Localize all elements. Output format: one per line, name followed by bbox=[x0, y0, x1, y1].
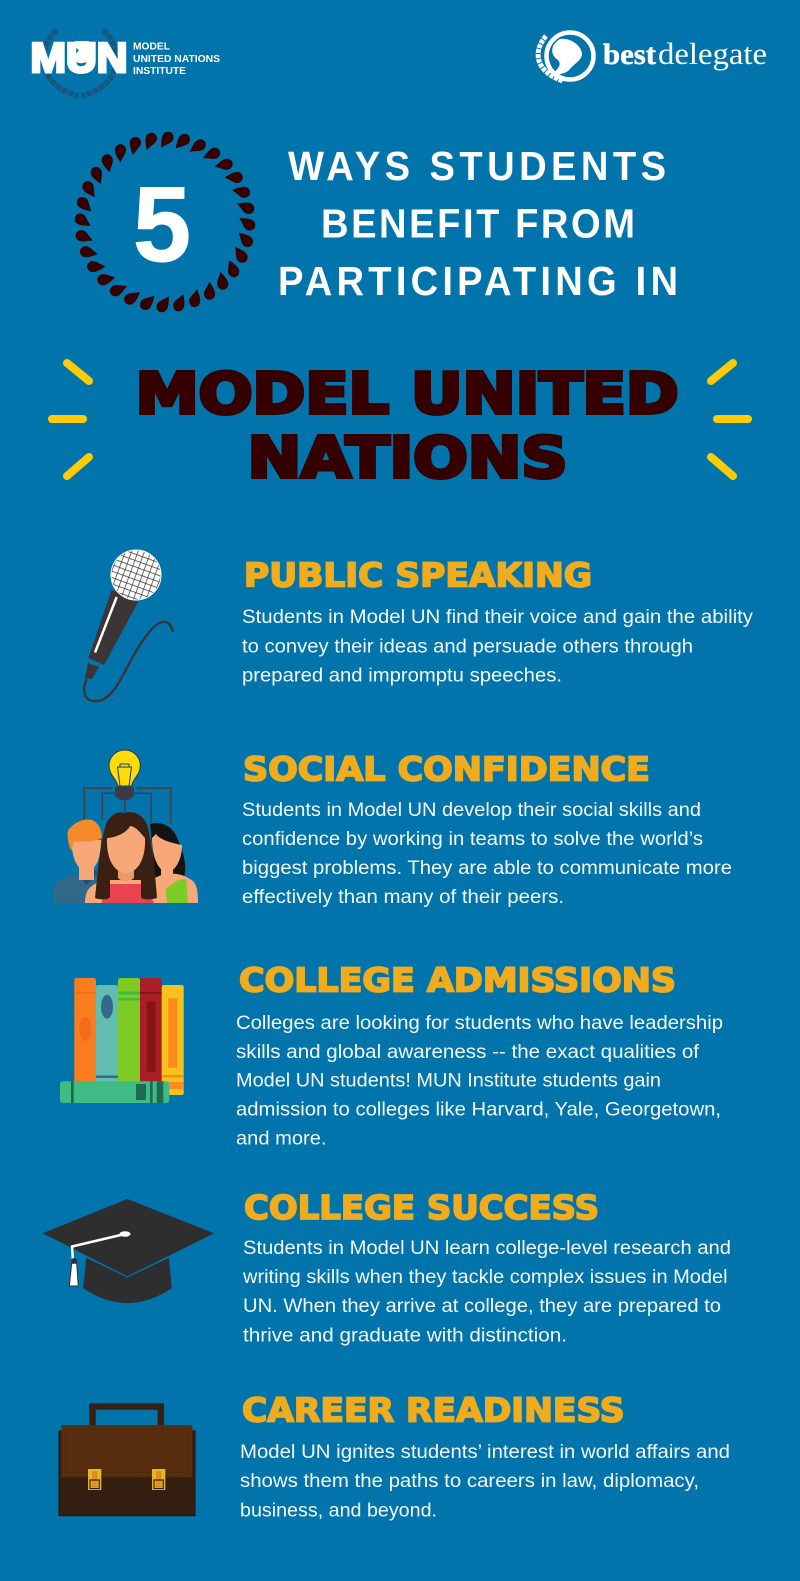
icon: team with light bulb bbox=[54, 750, 198, 903]
title: ways students benefit: PARTICIPATING IN bbox=[278, 259, 678, 304]
section: career readiness: business, and beyond. bbox=[240, 1500, 437, 1522]
section: college success: UN. When they arrive at college, they are prepared to bbox=[243, 1295, 721, 1317]
logo: Best Delegate: best bbox=[603, 38, 656, 71]
logo: MUN Institute bbox=[30, 30, 220, 96]
number badge: 5 in ring of drops: 5 bbox=[133, 164, 191, 284]
section: college admissions: admission to colleges like Harvard, Yale, Georgetown, bbox=[236, 1099, 721, 1121]
section: college admissions: Model UN students! MUN Institute students gain bbox=[236, 1070, 661, 1092]
section: college admissions: and more. bbox=[236, 1128, 326, 1150]
section: social confidence: SOCIAL CONFIDENCE bbox=[243, 750, 650, 788]
logo: MUN Institute: MODEL bbox=[133, 40, 171, 52]
section: college admissions: Colleges are looking for students who have leadership bbox=[236, 1012, 723, 1034]
icon: stack of books bbox=[60, 978, 184, 1103]
section: career readiness bbox=[240, 1390, 730, 1522]
section: public speaking: Students in Model UN find their voice and gain the ability bbox=[242, 606, 753, 628]
title: ways students benefit: WAYS STUDENTS bbox=[288, 144, 666, 189]
icon: briefcase bbox=[59, 1406, 195, 1516]
burst lines: right bbox=[711, 363, 748, 476]
section: college success: writing skills when they tackle complex issues in Model bbox=[242, 1266, 728, 1288]
section: social confidence bbox=[242, 750, 732, 908]
section: social confidence: effectively than many of their peers. bbox=[242, 886, 564, 908]
burst lines: left bbox=[52, 363, 89, 476]
section: college admissions bbox=[236, 960, 723, 1150]
section: public speaking: prepared and impromptu speeches. bbox=[242, 664, 562, 686]
section: college admissions: COLLEGE ADMISSIONS bbox=[239, 960, 676, 1000]
icon: microphone bbox=[84, 550, 173, 701]
logo: MUN Institute: INSTITUTE bbox=[133, 65, 186, 77]
title: ways students benefit: BENEFIT FROM bbox=[321, 201, 635, 247]
number badge: 5 in ring of drops bbox=[74, 131, 256, 313]
section: public speaking bbox=[242, 556, 753, 686]
title: model united nations: MODEL UNITED bbox=[136, 362, 678, 427]
section: social confidence: Students in Model UN develop their social skills and bbox=[242, 799, 701, 821]
section: career readiness: CAREER READINESS bbox=[242, 1390, 624, 1430]
section: college success: thrive and graduate with distinction. bbox=[243, 1324, 567, 1346]
section: public speaking: to convey their ideas and persuade others through bbox=[242, 636, 693, 658]
section: college success: COLLEGE SUCCESS bbox=[244, 1188, 599, 1227]
section: public speaking: PUBLIC SPEAKING bbox=[244, 556, 592, 594]
logo: MUN Institute: MUN bbox=[30, 34, 128, 81]
title: ways students benefit bbox=[278, 144, 678, 304]
title: model united nations bbox=[136, 362, 678, 491]
logo: MUN Institute: UNITED NATIONS bbox=[133, 53, 220, 65]
logo: Best Delegate: delegate bbox=[658, 36, 767, 71]
section: career readiness: Model UN ignites students’ interest in world affairs and bbox=[240, 1441, 730, 1463]
section: college success bbox=[242, 1188, 731, 1346]
logo: Best Delegate bbox=[538, 32, 767, 81]
title: model united nations: NATIONS bbox=[248, 426, 568, 491]
section: career readiness: shows them the paths to careers in law, diplomacy, bbox=[240, 1470, 699, 1492]
section: college success: Students in Model UN learn college-level research and bbox=[243, 1237, 731, 1259]
section: college admissions: skills and global awareness -- the exact qualities of bbox=[236, 1041, 700, 1063]
section: social confidence: confidence by working in teams to solve the world’s bbox=[242, 828, 703, 850]
icon: graduation cap bbox=[43, 1199, 214, 1303]
section: social confidence: biggest problems. They are able to communicate more bbox=[242, 857, 732, 879]
